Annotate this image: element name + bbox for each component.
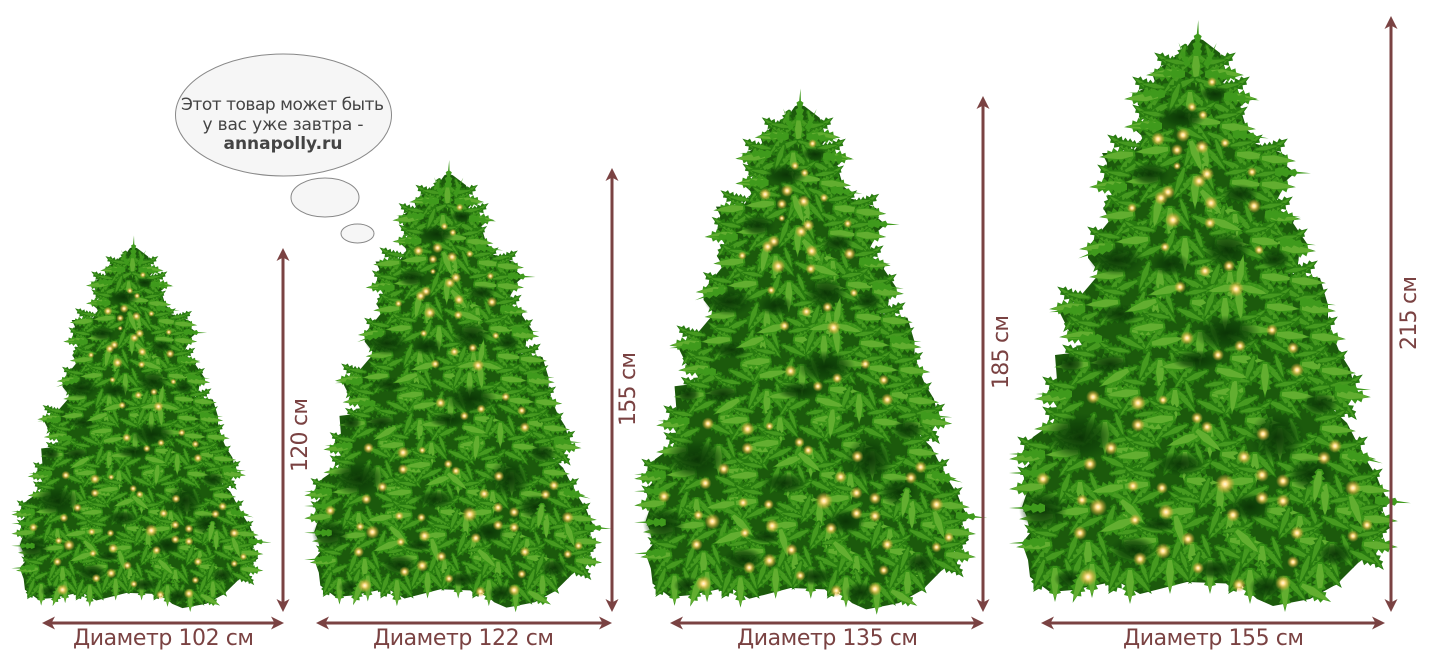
height arrow 120 cm: [276, 248, 290, 612]
height arrow 155 cm: [606, 168, 618, 612]
label: diameter 155 cm: Диаметр 155 см: [1123, 626, 1304, 651]
height arrow 185 cm: [976, 96, 990, 612]
label: diameter 135 cm: Диаметр 135 см: [737, 626, 918, 651]
diameter arrow 135 cm: [670, 616, 984, 630]
diameter arrow 102 cm: [42, 616, 284, 630]
tree 2: 155 cm: [304, 160, 612, 612]
tree 3: 185 cm: [634, 88, 988, 615]
thought bubble callout: [176, 54, 392, 243]
diameter arrow 155 cm: [1041, 616, 1385, 630]
thought bubble callout: Этот товар может быть: [181, 95, 384, 115]
tree 1: 120 cm: [11, 235, 272, 612]
label: diameter 122 cm: Диаметр 122 см: [373, 626, 554, 651]
label: height 120 cm: 120 см: [288, 398, 313, 472]
thought bubble callout: annapolly.ru: [224, 134, 342, 154]
thought bubble callout: у вас уже завтра -: [202, 115, 364, 135]
label: height 155 cm: 155 см: [616, 352, 641, 426]
height arrow 215 cm: [1384, 16, 1398, 612]
label: diameter 102 cm: Диаметр 102 см: [73, 626, 254, 651]
label: height 185 cm: 185 см: [989, 315, 1014, 389]
tree 4: 215 cm: [1008, 20, 1411, 612]
diameter arrow 122 cm: [316, 616, 612, 630]
label: height 215 cm: 215 см: [1397, 276, 1422, 350]
